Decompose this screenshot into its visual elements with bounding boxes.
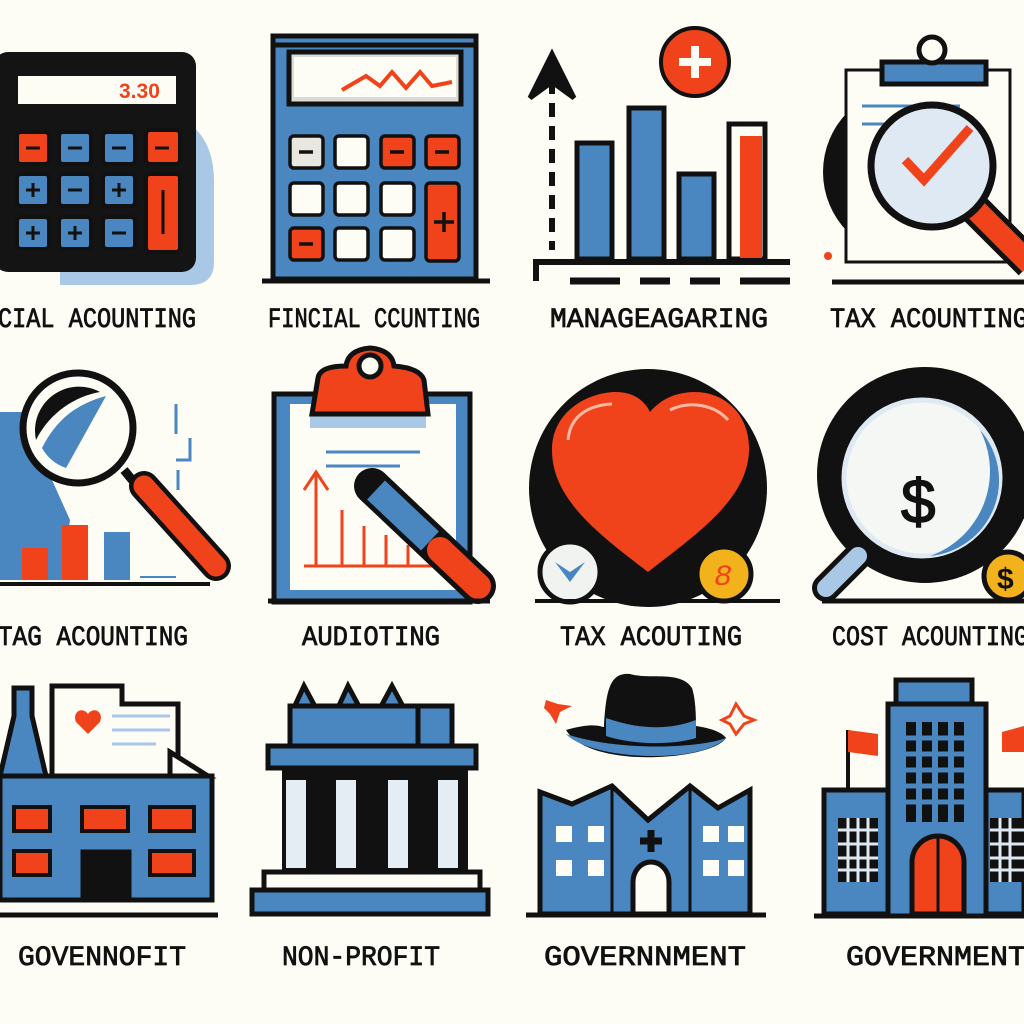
label: tax accounting 2: TAX ACOUTING [560, 623, 742, 654]
icon: tax magnifier and clipboard [823, 37, 1024, 282]
icon: hat and building [526, 674, 766, 915]
icon: calculator 1 [0, 52, 214, 285]
icon: columned building [252, 686, 488, 914]
label: government nonprofit: GOVENNOFIT [18, 943, 186, 974]
icon: heart [529, 369, 780, 607]
label: tag accounting: TAG ACOUNTING [0, 623, 188, 654]
label: auditing: AUDIOTING [302, 623, 440, 654]
icon: government tower [814, 680, 1024, 916]
icon: magnifier and bars [0, 373, 216, 584]
icon: bar chart with arrow [530, 28, 790, 281]
icon: cost magnifier: $ [901, 468, 935, 537]
icon: cost magnifier: $ [997, 563, 1014, 596]
label: financial accounting 2: FINCIAL CCUNTING [268, 305, 480, 336]
icon: clipboard and pen [268, 348, 490, 602]
label: managerial accounting: MANAGEAGARING [550, 305, 768, 336]
label: non-profit: NON-PROFIT [282, 943, 440, 974]
label: financial accounting: CIAL ACOUNTING [0, 305, 196, 336]
label: government 1: GOVERNNMENT [544, 943, 746, 974]
label: government 2: GOVERNMENT [846, 943, 1024, 974]
icon: calculator 2 [262, 36, 490, 281]
icon: factory building with letter [0, 686, 218, 915]
icon: cost magnifier [817, 367, 1024, 601]
icon: calculator 1: 3.30 [119, 80, 160, 103]
icon: heart: 8 [714, 561, 732, 595]
